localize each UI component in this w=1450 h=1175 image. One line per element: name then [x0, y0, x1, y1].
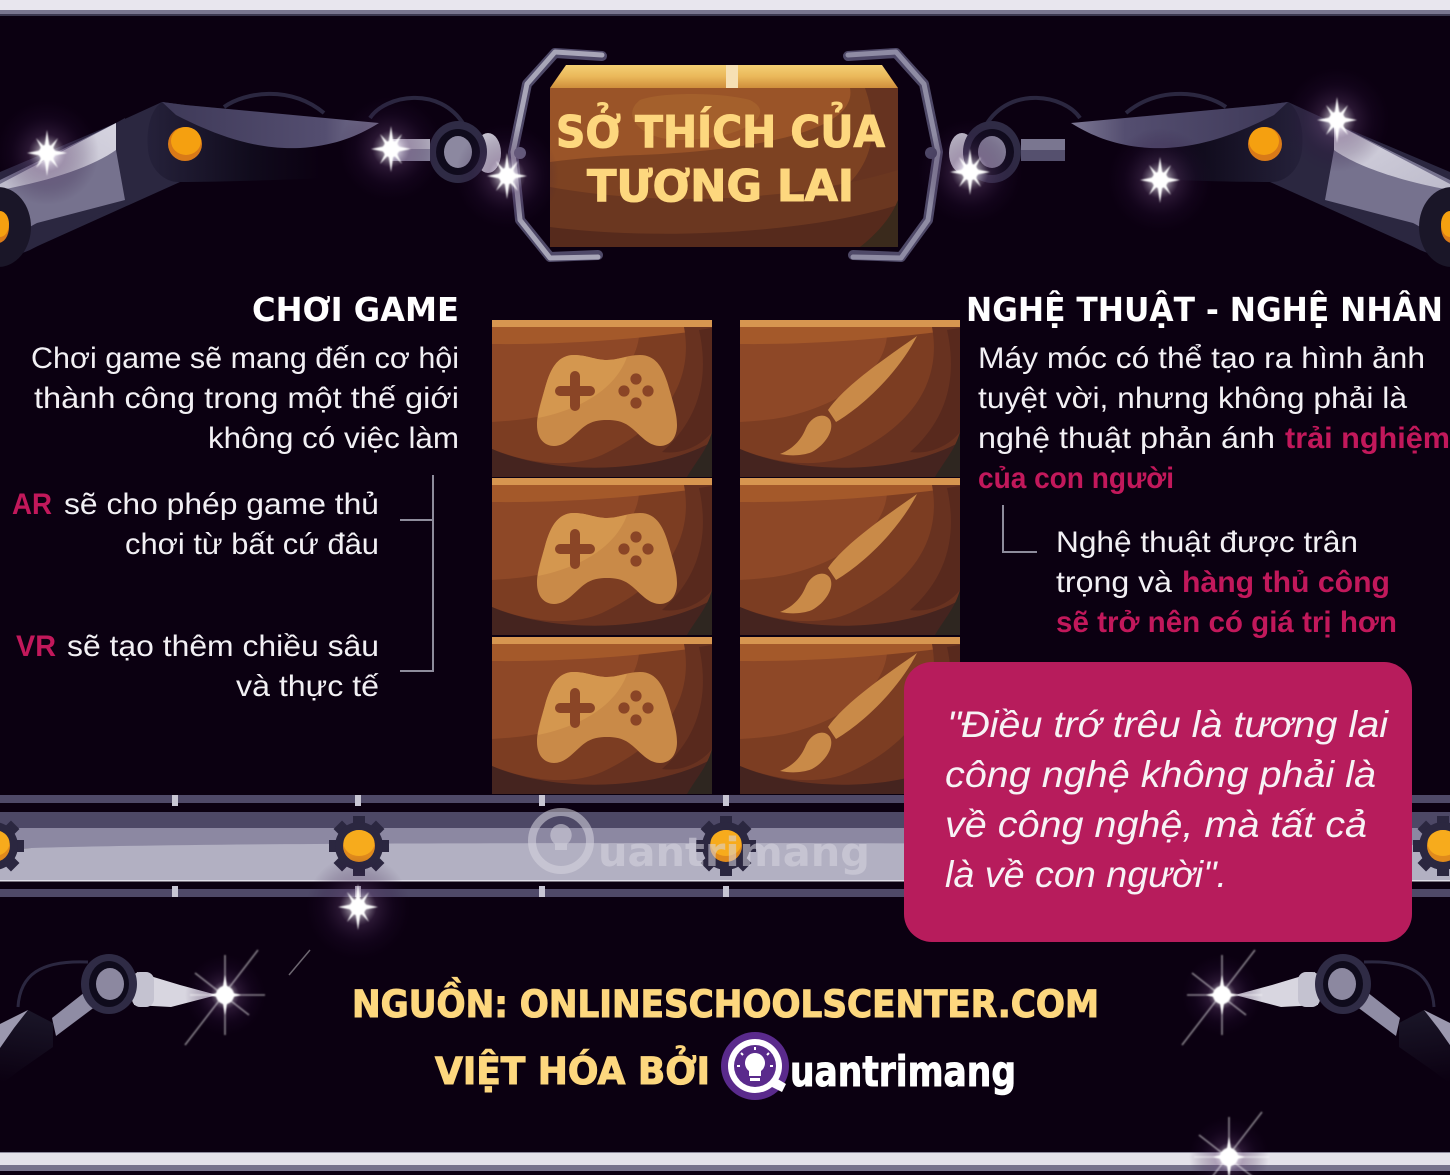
text: VR point: và thực tế — [236, 670, 379, 703]
text: VR point: sẽ tạo thêm chiều sâu — [67, 630, 379, 663]
crate stack: gaming — [492, 320, 712, 794]
text: art intro — [978, 342, 1450, 495]
robot arm: bottom left — [0, 954, 217, 1085]
text: handicraft point — [1056, 526, 1397, 639]
text: VR point — [16, 630, 379, 703]
text: art intro: trải nghiệm — [1285, 422, 1450, 455]
text: handicraft point: Nghệ thuật được trân — [1056, 526, 1358, 559]
heading: gaming: CHƠI GAME — [252, 290, 459, 329]
text: AR point — [12, 488, 379, 561]
text: VR point: VR — [16, 630, 56, 663]
text: art intro: của con người — [978, 462, 1174, 495]
quote box: là về con người". — [945, 854, 1227, 895]
watermark — [532, 812, 870, 876]
quote box: công nghệ không phải là — [945, 754, 1376, 795]
text: gaming intro: Chơi game sẽ mang đến cơ hội — [31, 342, 459, 375]
text: art intro: tuyệt vời, nhưng không phải là — [978, 382, 1407, 415]
text: art intro: Máy móc có thể tạo ra hình ảnh — [978, 342, 1425, 375]
bracket connector: gaming — [400, 475, 433, 671]
text: art intro: nghệ thuật phản ánh — [978, 422, 1275, 455]
text: gaming intro: không có việc làm — [208, 422, 459, 455]
robot arm: top left — [0, 94, 501, 267]
text: AR point: AR — [12, 488, 52, 521]
text: gaming intro: thành công trong một thế giới — [34, 382, 459, 415]
conveyor belt — [0, 795, 1450, 897]
quote box: về công nghệ, mà tất cả — [945, 804, 1367, 845]
title crate — [550, 65, 898, 247]
text: AR point: chơi từ bất cứ đâu — [125, 528, 379, 561]
text: handicraft point: hàng thủ công — [1182, 566, 1390, 599]
quote box — [904, 662, 1412, 942]
top metal bar — [0, 0, 1450, 16]
text: gaming intro — [31, 342, 459, 455]
quote box: "Điều trớ trêu là tương lai — [947, 704, 1390, 745]
robot arm: bottom right — [1235, 954, 1450, 1085]
title text — [556, 101, 885, 212]
text: AR point: sẽ cho phép game thủ — [64, 488, 379, 521]
crate stack: art — [740, 320, 960, 794]
title text: TƯƠNG LAI — [587, 161, 854, 212]
bracket connector: art — [1003, 505, 1037, 552]
logo: Quantrimang: uantrimang — [790, 1047, 1016, 1096]
text: handicraft point: trọng và — [1056, 566, 1172, 599]
title text: SỞ THÍCH CỦA — [556, 101, 885, 158]
bottom metal bar — [0, 1152, 1450, 1171]
footer: source: NGUỒN: ONLINESCHOOLSCENTER.COM — [352, 977, 1099, 1026]
robot arm: top right — [949, 94, 1450, 267]
gripper frame around title — [513, 52, 938, 258]
footer: translated by: VIỆT HÓA BỞI — [435, 1045, 710, 1093]
watermark: uantrimang — [598, 830, 870, 876]
gears — [0, 816, 1450, 876]
logo: Quantrimang — [721, 1032, 1016, 1100]
text: handicraft point: sẽ trở nên có giá trị hơn — [1056, 606, 1397, 639]
